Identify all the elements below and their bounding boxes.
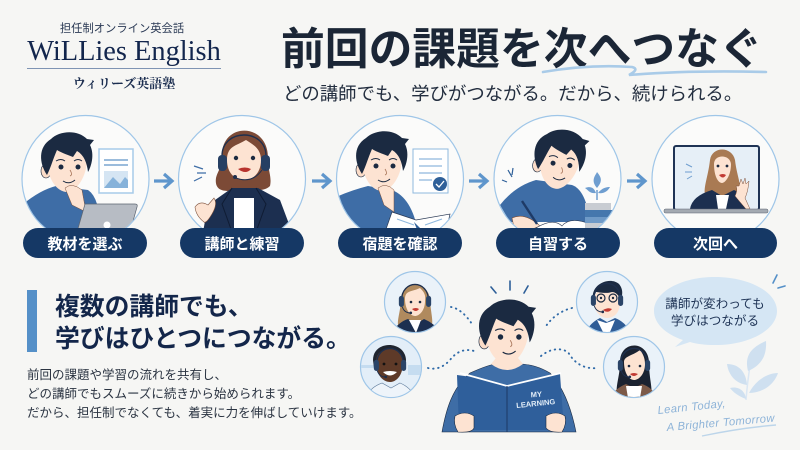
handwritten slogan <box>657 398 776 436</box>
dotted connectors <box>428 307 598 369</box>
step 4 label: 自習する <box>528 235 588 253</box>
step 1 label <box>23 228 147 258</box>
subtitle: どの講師でも、学びがつながる。だから、続けられる。 <box>283 83 742 104</box>
step 1: choose materials <box>22 116 149 242</box>
logo: ウィリーズ英語塾 <box>73 76 175 91</box>
step 4: self study <box>494 116 621 242</box>
section description: だから、担任制でなくても、着実に力を伸ばしていけます。 <box>27 405 362 420</box>
step 2 label <box>180 228 304 258</box>
speech bubble: 講師が変わっても <box>665 296 765 311</box>
handwritten slogan: A Brighter Tomorrow <box>665 413 776 434</box>
step 1 label: 教材を選ぶ <box>47 235 123 253</box>
step 5 label: 次回へ <box>693 236 738 253</box>
logo <box>27 21 221 91</box>
logo: 担任制オンライン英会話 <box>60 21 184 35</box>
speech bubble <box>654 277 777 347</box>
teacher avatar 4 <box>604 336 664 400</box>
step 5 label <box>654 228 777 258</box>
teacher avatar 3 <box>576 272 638 335</box>
title: 前回の課題を次へつなぐ <box>281 25 763 74</box>
central learner with book <box>442 299 576 432</box>
step 3: check homework <box>336 116 464 242</box>
step 5: next lesson <box>652 116 779 242</box>
section heading: 学びはひとつにつながる。 <box>55 324 351 353</box>
section heading: 複数の講師でも、 <box>55 293 253 321</box>
step 2 label: 講師と練習 <box>204 235 280 253</box>
speech bubble: 学びはつながる <box>671 313 759 328</box>
title underline brush <box>543 66 766 75</box>
arrow 3 <box>469 174 487 188</box>
arrow 2 <box>312 174 330 188</box>
teacher avatar 1 <box>384 272 446 335</box>
plant <box>727 341 778 400</box>
handwritten slogan: Learn Today, <box>657 398 726 417</box>
step 3 label: 宿題を確認 <box>362 235 438 253</box>
central learner with book: MY <box>530 390 542 399</box>
emphasis rays <box>491 281 528 293</box>
section description: どの講師でもスムーズに続きから始められます。 <box>27 386 300 401</box>
central learner with book: LEARNING <box>516 397 556 410</box>
bubble accent ticks <box>773 275 785 288</box>
arrow 1 <box>154 174 172 188</box>
arrow 4 <box>627 174 645 188</box>
section heading accent bar <box>27 290 37 352</box>
logo: WiLLies English <box>27 36 221 67</box>
step 4 label <box>496 228 620 258</box>
section description: 前回の課題や学習の流れを共有し、 <box>27 367 227 382</box>
step 2: practice with teacher <box>178 116 306 242</box>
teacher avatar 2 <box>360 336 422 400</box>
step 3 label <box>338 228 462 258</box>
